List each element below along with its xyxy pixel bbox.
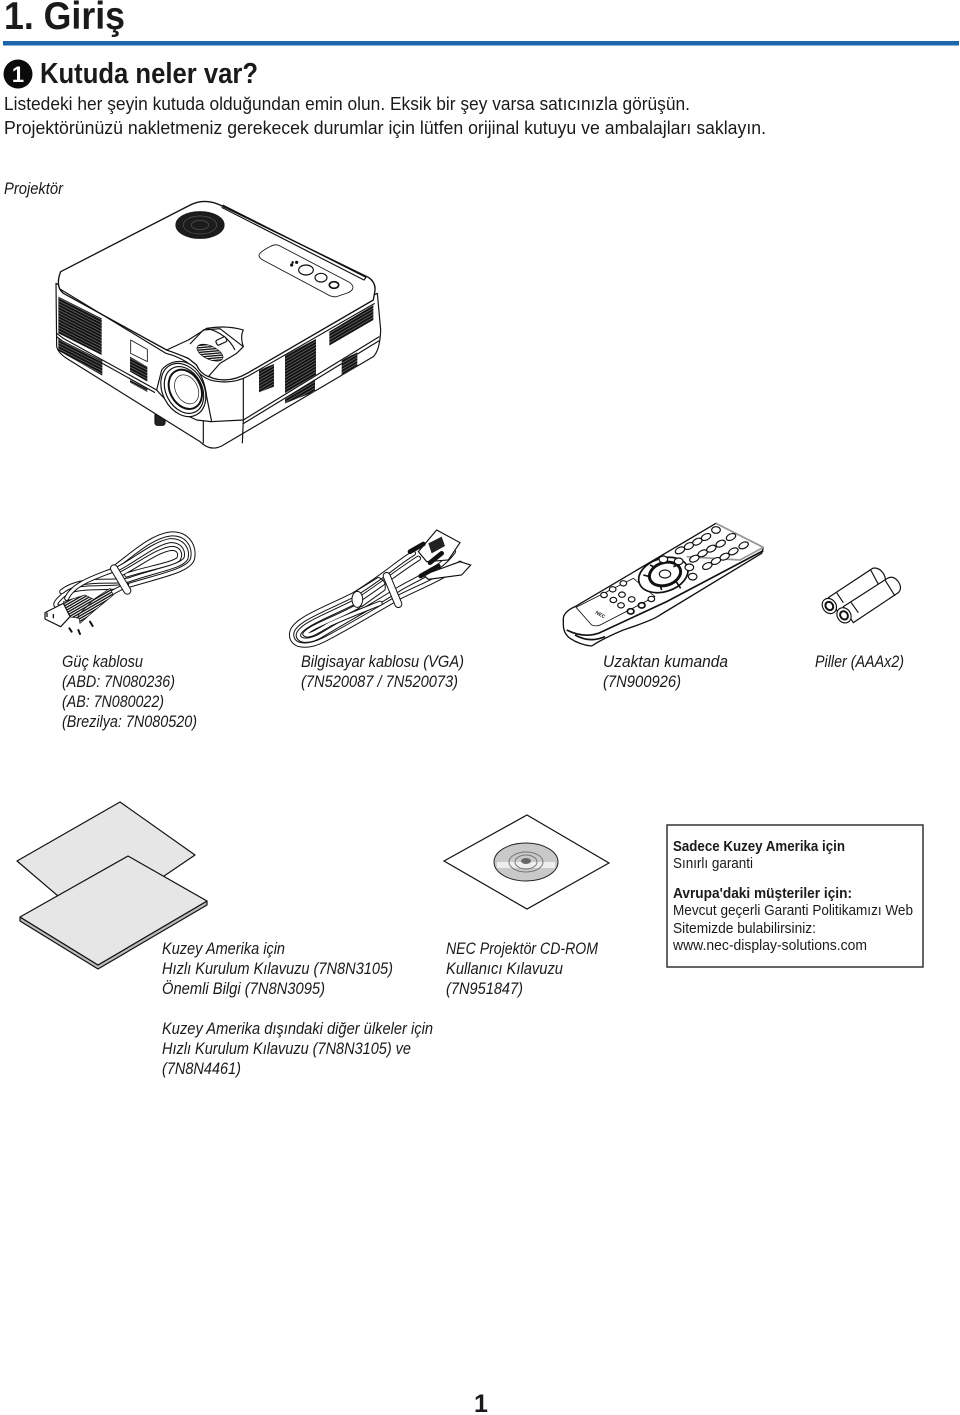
caption: remote control <box>603 653 728 691</box>
icon: VGA cable <box>292 530 471 645</box>
caption: power cable: Güç kablosu <box>62 653 143 671</box>
icon: projector <box>56 201 381 448</box>
icon: CD-ROM <box>444 815 609 909</box>
intro text <box>4 93 766 138</box>
caption: power cable: (Brezilya: 7N080520) <box>62 713 197 731</box>
caption: VGA cable: Bilgisayar kablosu (VGA) <box>301 653 464 671</box>
icon: power cable <box>45 534 193 634</box>
panel: warranty <box>667 825 923 967</box>
caption: manuals North America: Önemli Bilgi (7N8N3095) <box>162 980 325 998</box>
icon: remote control <box>563 523 763 646</box>
caption: CD-ROM: (7N951847) <box>446 980 523 998</box>
intro text: Listedeki her şeyin kutuda olduğundan emin olun. Eksik bir şey varsa satıcınızla görüşün. <box>4 93 690 114</box>
caption: power cable: (AB: 7N080022) <box>62 693 164 711</box>
icon: manuals <box>17 802 207 969</box>
icon: number 1: 1 <box>12 62 24 87</box>
caption: manuals North America <box>162 940 393 998</box>
caption: manuals other countries: Hızlı Kurulum Kılavuzu (7N8N3105) ve <box>162 1040 411 1058</box>
icon: number 1 <box>4 60 32 88</box>
caption: power cable: (ABD: 7N080236) <box>62 673 175 691</box>
panel: warranty: www.nec-display-solutions.com <box>672 937 867 954</box>
caption: CD-ROM: Kullanıcı Kılavuzu <box>446 960 563 978</box>
caption: manuals North America: Kuzey Amerika için <box>162 940 285 958</box>
caption: remote control: Uzaktan kumanda <box>603 653 728 671</box>
icon: remote control: NEC <box>594 610 606 621</box>
caption: CD-ROM <box>446 940 598 998</box>
panel: warranty: Sitemizde bulabilirsiniz: <box>673 920 816 937</box>
projector label: Projektör <box>4 180 64 198</box>
caption: power cable <box>62 653 197 731</box>
panel: warranty: Avrupa'daki müşteriler için: <box>673 885 852 902</box>
caption: manuals other countries: (7N8N4461) <box>162 1060 241 1078</box>
icon: batteries <box>819 568 900 626</box>
caption: VGA cable: (7N520087 / 7N520073) <box>301 673 458 691</box>
caption: manuals other countries <box>162 1020 433 1078</box>
caption: VGA cable <box>301 653 464 691</box>
panel: warranty: Sınırlı garanti <box>673 855 753 872</box>
panel: warranty: Mevcut geçerli Garanti Politikamızı Web <box>673 902 913 919</box>
caption: manuals other countries: Kuzey Amerika dışındaki diğer ülkeler için <box>162 1020 433 1038</box>
caption: manuals North America: Hızlı Kurulum Kılavuzu (7N8N3105) <box>162 960 393 978</box>
caption: CD-ROM: NEC Projektör CD-ROM <box>446 940 598 958</box>
intro text: Projektörünüzü nakletmeniz gerekecek durumlar için lütfen orijinal kutuyu ve ambalajları saklayın. <box>4 117 766 138</box>
section heading: Kutuda neler var? <box>40 58 258 90</box>
caption: remote control: (7N900926) <box>603 673 681 691</box>
caption: batteries: Piller (AAAx2) <box>815 653 904 671</box>
panel: warranty: Sadece Kuzey Amerika için <box>673 838 845 855</box>
